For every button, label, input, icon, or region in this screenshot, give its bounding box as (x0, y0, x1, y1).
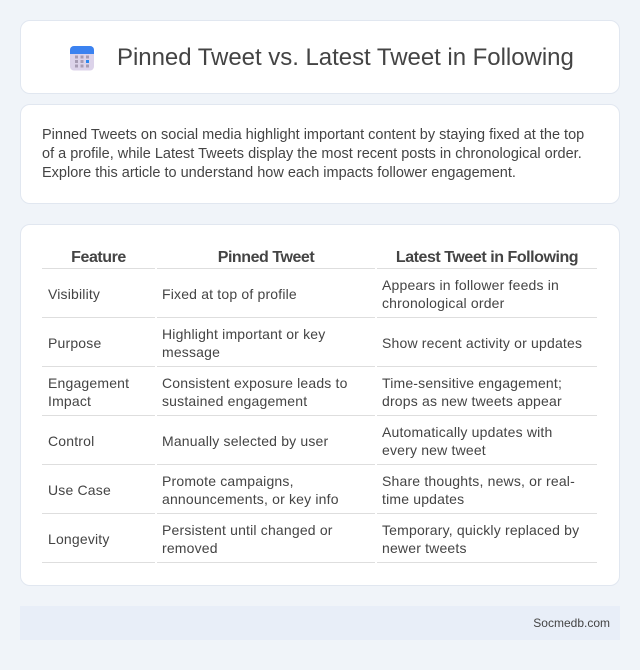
cell: Consistent exposure leads to (162, 375, 348, 391)
cell: drops as new tweets appear (382, 393, 562, 409)
cell: Promote campaigns, (162, 473, 294, 489)
footer bar (20, 606, 620, 640)
panel: title card (20, 20, 620, 94)
cell: removed (162, 540, 218, 556)
cell: Show recent activity or updates (382, 335, 582, 351)
cell: Manually selected by user (162, 433, 328, 449)
row: Engagement Impact: Impact (48, 393, 91, 409)
cell: Automatically updates with (382, 424, 552, 440)
row: Engagement Impact (48, 375, 129, 409)
cell: announcements, or key info (162, 491, 339, 507)
row: Longevity: Longevity (48, 531, 110, 547)
cell (162, 473, 339, 507)
cell: Share thoughts, news, or real- (382, 473, 575, 489)
cell: Appears in follower feeds in (382, 277, 559, 293)
intro text: of a profile, while Latest Tweets display the most recent posts in chronological order. (42, 146, 582, 162)
panel: comparison table (20, 224, 620, 586)
cell (162, 522, 333, 556)
cell (382, 522, 580, 556)
cell: Temporary, quickly replaced by (382, 522, 579, 538)
title: Pinned Tweet vs. Latest Tweet in Following (117, 44, 574, 71)
intro text: Pinned Tweets on social media highlight important content by staying fixed at the top (42, 127, 584, 143)
cell: sustained engagement (162, 393, 307, 409)
footer credit: Socmedb.com (533, 616, 610, 630)
cell: Persistent until changed or (162, 522, 333, 538)
row: Use Case: Use Case (48, 482, 111, 498)
cell: Fixed at top of profile (162, 286, 297, 302)
cell: chronological order (382, 295, 504, 311)
cell (382, 424, 552, 458)
cell (162, 326, 326, 360)
row: Visibility: Visibility (48, 286, 100, 302)
column header: Latest Tweet in Following: Latest Tweet in Following (396, 249, 578, 266)
intro text: Explore this article to understand how each impacts follower engagement. (42, 165, 516, 181)
cell: every new tweet (382, 442, 486, 458)
cell: Time-sensitive engagement; (382, 375, 562, 391)
panel: introduction (20, 104, 620, 204)
cell (382, 473, 575, 507)
cell: Highlight important or key (162, 326, 325, 342)
column header: Pinned Tweet: Pinned Tweet (218, 249, 314, 266)
row: Engagement Impact: Engagement (48, 375, 129, 391)
cell (162, 375, 348, 409)
intro text (42, 127, 584, 181)
cell (382, 277, 559, 311)
icon: calendar (70, 46, 94, 70)
column header: Feature: Feature (71, 249, 126, 266)
cell (382, 375, 562, 409)
row: Control: Control (48, 433, 94, 449)
row: Purpose: Purpose (48, 335, 101, 351)
cell: newer tweets (382, 540, 467, 556)
cell: message (162, 344, 220, 360)
cell: time updates (382, 491, 464, 507)
